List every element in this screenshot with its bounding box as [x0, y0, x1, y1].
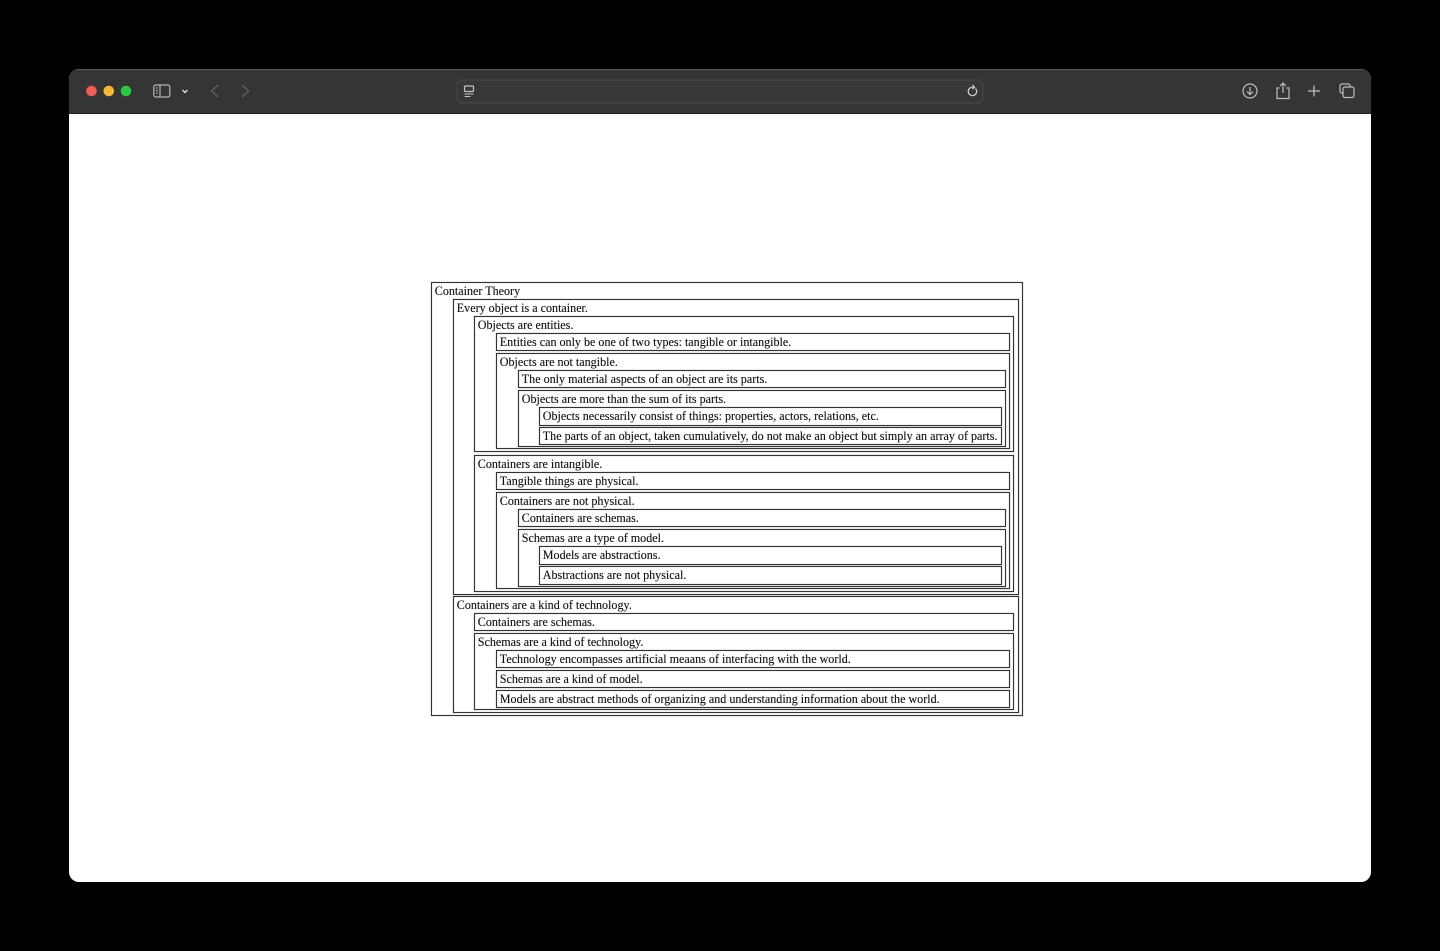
box: Entities types: Entities can only be one of two types: tangible or intangible.	[500, 334, 791, 348]
box: Tangible things	[496, 472, 1010, 490]
icon: traffic lights	[86, 86, 131, 96]
box: Container Theory: Container Theory	[435, 284, 520, 298]
box: Containers are not physical	[496, 492, 1010, 589]
box: Models are abstract methods	[496, 690, 1010, 708]
box: Schemas are a kind of technology: Schemas are a kind of technology.	[478, 634, 643, 648]
browser toolbar	[69, 69, 1371, 114]
box: Technology encompasses: Technology encompasses artificial meaans of interfacing with the world.	[500, 652, 851, 666]
box: Container Theory	[431, 282, 1023, 716]
browser window	[69, 69, 1371, 882]
box: Containers are intangible	[474, 455, 1014, 592]
box: Objects are not tangible	[496, 353, 1010, 449]
diagram: nested container theory boxes	[430, 282, 1024, 716]
icon: download	[1243, 84, 1257, 98]
box: Schemas are a kind of model: Schemas are a kind of model.	[500, 672, 643, 686]
icon: tab overview	[1340, 84, 1354, 98]
box: Containers are intangible: Containers are intangible.	[478, 456, 602, 470]
box: Models are abstractions	[539, 546, 1002, 565]
box: Models are abstract methods: Models are abstract methods of organizing and understanding information about the world.	[500, 692, 940, 706]
box: Containers are schemas: Containers are schemas.	[522, 510, 639, 524]
box: Containers are a kind of technology: Containers are a kind of technology.	[457, 598, 632, 612]
icon: back and forward arrows	[212, 85, 248, 97]
box: Containers are a kind of technology	[453, 596, 1019, 713]
box: Abstractions not physical: Abstractions are not physical.	[543, 568, 686, 582]
box: Objects are not tangible: Objects are not tangible.	[500, 354, 618, 368]
box: Only material aspects: The only material aspects of an object are its parts.	[522, 372, 767, 386]
box: Containers are schemas (technology): Containers are schemas.	[478, 614, 595, 628]
box: Tangible things: Tangible things are physical.	[500, 474, 638, 488]
box: Containers are schemas	[518, 509, 1006, 527]
box: More than the sum: Objects are more than the sum of its parts.	[522, 392, 726, 406]
box: Containers are schemas (technology)	[474, 613, 1014, 631]
box: Every object is a container: Every object is a container.	[457, 300, 588, 314]
box: Models are abstractions: Models are abstractions.	[543, 548, 661, 562]
box: Only material aspects	[518, 370, 1006, 388]
box: Objects necessarily consist: Objects necessarily consist of things: properties, actors, relations, etc.	[543, 408, 879, 422]
browser toolbar icons	[86, 80, 1355, 104]
box: Containers are not physical: Containers are not physical.	[500, 494, 635, 508]
box: Schemas are a kind of technology	[474, 633, 1014, 710]
box: Schemas are a type of model: Schemas are a type of model.	[522, 530, 664, 544]
box: Abstractions not physical	[539, 566, 1002, 585]
icon: new tab	[1308, 86, 1320, 96]
box: Objects are entities: Objects are entities.	[478, 318, 573, 332]
box: Schemas are a type of model	[518, 529, 1006, 587]
address bar	[457, 80, 983, 103]
box: Objects necessarily consist	[539, 407, 1002, 426]
icon: sidebar toggle	[154, 85, 188, 97]
box: Objects are entities	[474, 316, 1014, 452]
box: Every object is a container	[453, 299, 1019, 595]
box: Parts of an object: The parts of an object, taken cumulatively, do not make an object but simply an array of parts.	[543, 428, 997, 442]
box: Entities types	[496, 333, 1010, 351]
icon: share	[1277, 83, 1289, 98]
box: More than the sum	[518, 390, 1006, 447]
box: Schemas are a kind of model	[496, 670, 1010, 688]
box: Technology encompasses	[496, 650, 1010, 668]
